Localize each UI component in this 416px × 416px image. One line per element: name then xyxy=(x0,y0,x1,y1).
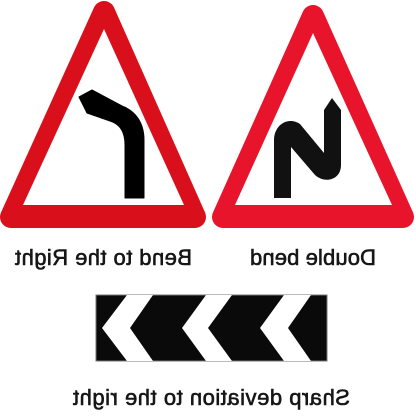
sign: double bend xyxy=(223,16,403,217)
chevron 3 xyxy=(260,295,311,361)
label: bend to the right: Bend to the Right xyxy=(15,245,192,270)
label: double bend: Double bend xyxy=(250,245,376,270)
icon: double bend arrow xyxy=(274,98,341,198)
sign: bend to the right xyxy=(11,12,195,217)
sign: chevron board xyxy=(96,295,327,361)
icon: bend arrow xyxy=(79,90,144,198)
chevron 1 xyxy=(102,295,153,361)
chevron 2 xyxy=(182,295,232,361)
label: sharp deviation to the right: Sharp deviation to the right xyxy=(73,385,350,410)
